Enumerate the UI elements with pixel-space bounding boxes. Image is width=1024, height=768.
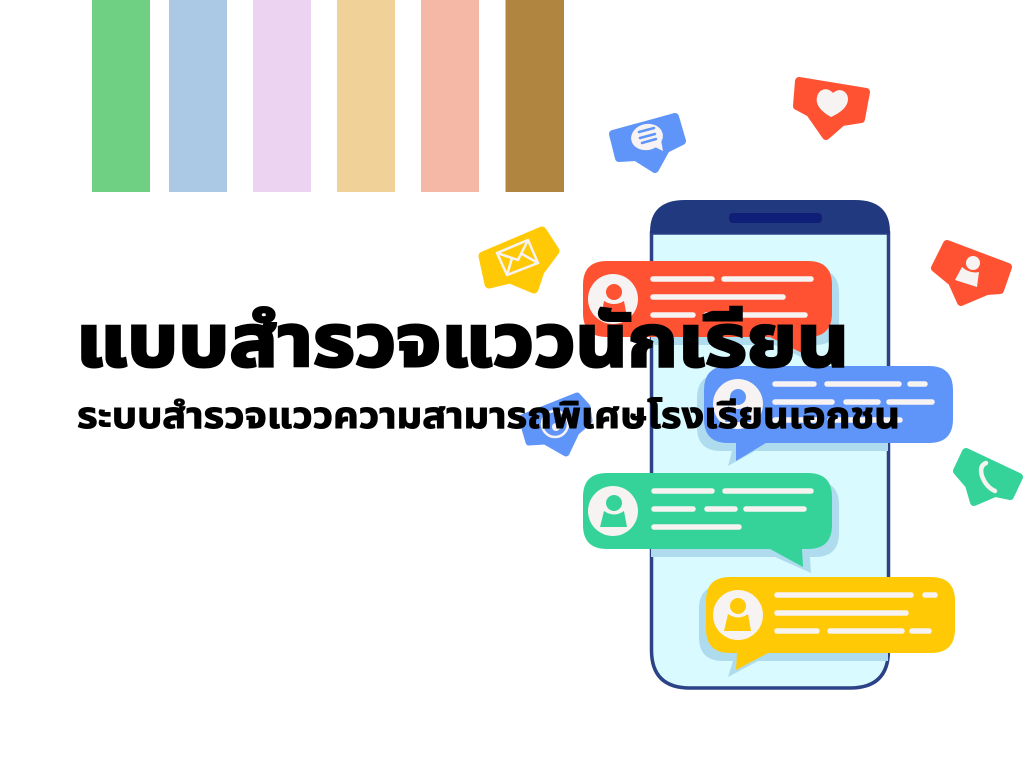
icon: blue comment bubble xyxy=(613,117,682,169)
phone xyxy=(650,200,890,688)
phone top bar xyxy=(650,200,890,234)
icon: red heart bubble xyxy=(797,81,866,136)
yellow message bubble xyxy=(699,577,955,677)
phone speaker xyxy=(729,213,822,223)
title: แบบสำรวจแววนักเรียน xyxy=(76,301,849,382)
blue message bubble xyxy=(697,366,953,466)
subtitle: ระบบสำรวจแววความสามารถพิเศษโรงเรียนเอกชน xyxy=(77,395,900,436)
red message bubble xyxy=(583,261,839,362)
icon: blue phone-call bubble xyxy=(522,396,589,453)
icon: red person bubble xyxy=(935,244,1008,302)
icon: yellow envelope bubble xyxy=(483,231,555,289)
colour stripes xyxy=(92,0,564,192)
green message bubble xyxy=(583,473,839,573)
icon: green phone bubble xyxy=(957,452,1019,502)
